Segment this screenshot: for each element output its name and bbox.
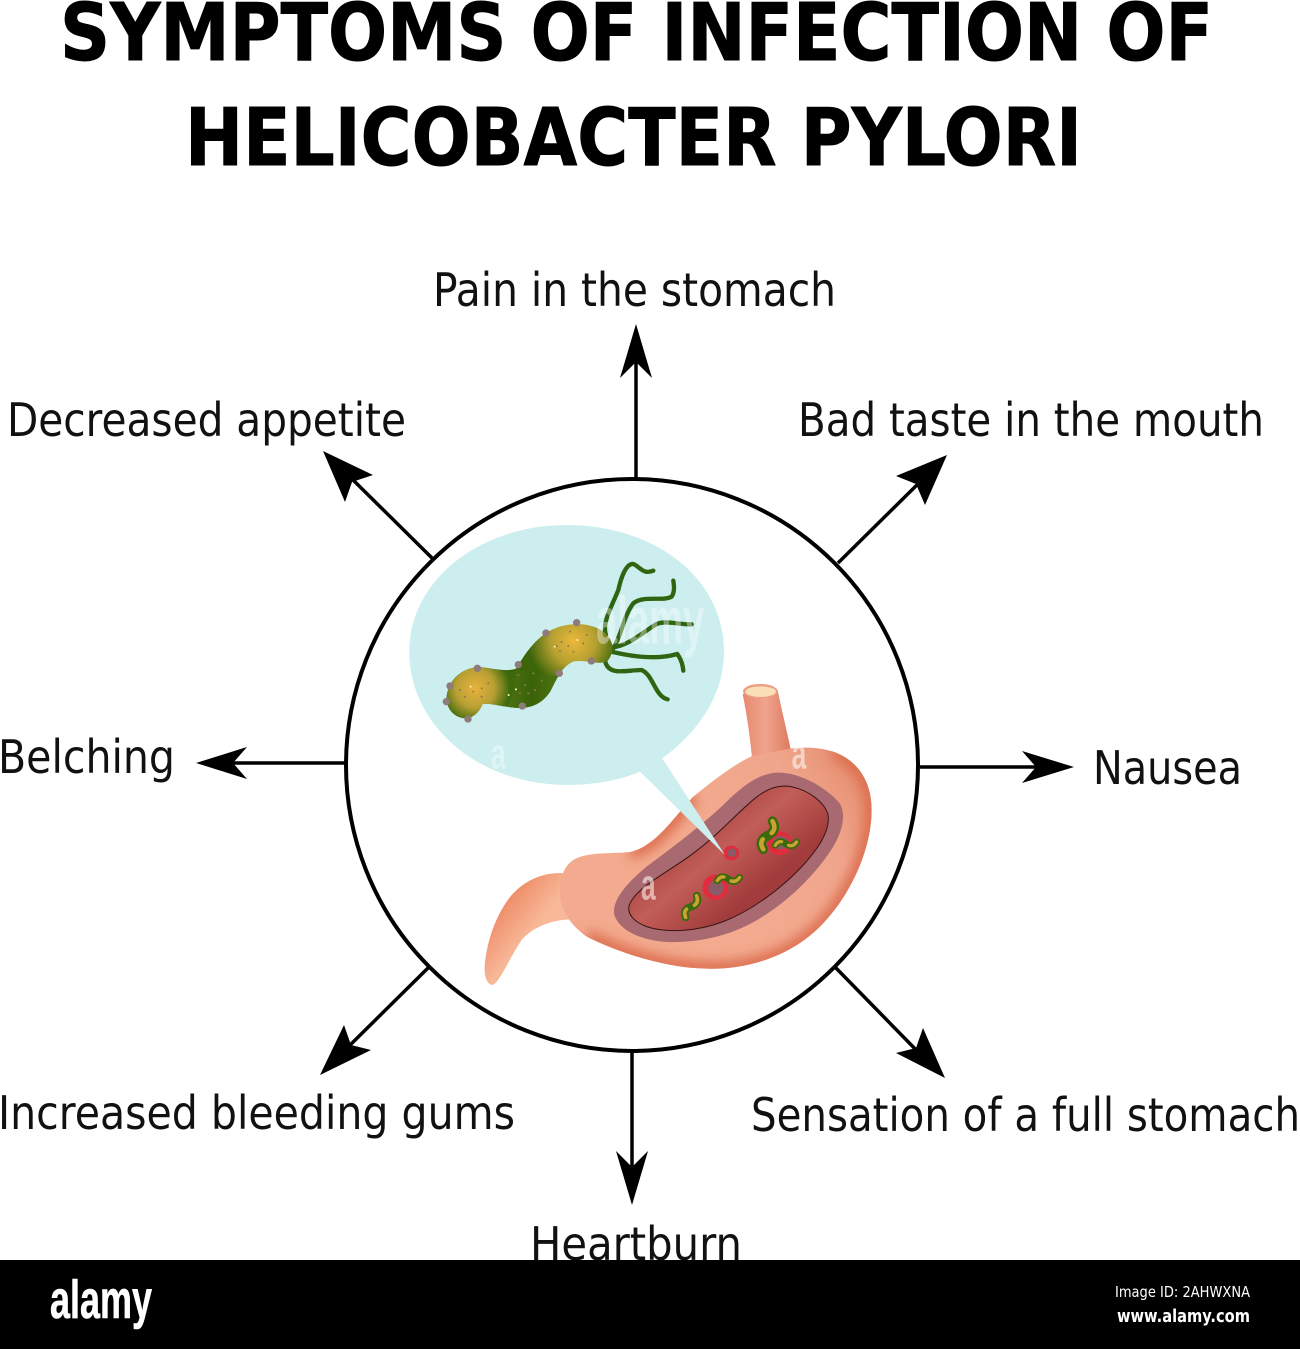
bubble <box>409 525 725 855</box>
stomach interior <box>629 786 828 931</box>
pyloric tail <box>485 873 572 985</box>
central circle <box>346 479 918 1051</box>
bacterium body <box>447 624 613 718</box>
stomach wall band <box>614 773 843 942</box>
stomach body <box>560 748 872 969</box>
flagella <box>605 564 692 699</box>
arrow: lower left <box>320 967 429 1075</box>
stomach illustration <box>485 684 872 985</box>
arrow: down <box>616 1052 648 1205</box>
surface knobs <box>443 619 595 723</box>
label: nausea: Nausea <box>1093 741 1242 795</box>
footer logo: alamy <box>50 1270 152 1330</box>
label: increased bleeding gums: Increased bleeding gums <box>0 1086 515 1140</box>
watermark letters on stomach: a <box>792 730 807 778</box>
watermark letters on stomach: a <box>641 861 656 909</box>
speech bubble with bacterium <box>409 525 725 855</box>
surface dots <box>459 631 588 698</box>
watermark: a <box>491 730 507 778</box>
watermark: alamy <box>596 584 704 658</box>
arrow: upper right <box>838 455 947 563</box>
label: heartburn: Heartburn <box>530 1217 742 1271</box>
arrow: upper left <box>323 451 432 558</box>
arrow: up <box>620 324 652 478</box>
image id: Image ID: 2AHWXNA <box>1115 1283 1251 1301</box>
title <box>60 0 1213 184</box>
label: belching: Belching <box>0 730 175 784</box>
watermark <box>491 584 704 778</box>
label: pain in the stomach: Pain in the stomach <box>433 263 836 317</box>
footer bar <box>0 1260 1300 1349</box>
esophagus <box>743 684 792 757</box>
arrow: left <box>196 747 346 779</box>
website: www.alamy.com <box>1117 1306 1250 1327</box>
small bacteria <box>683 820 797 919</box>
label: decreased appetite: Decreased appetite <box>7 393 406 447</box>
watermark letters on stomach <box>641 730 807 909</box>
ulcers <box>703 831 792 900</box>
arrow: right <box>920 751 1074 783</box>
title: HELICOBACTER PYLORI <box>185 92 1082 184</box>
arrow: lower right <box>835 967 945 1078</box>
